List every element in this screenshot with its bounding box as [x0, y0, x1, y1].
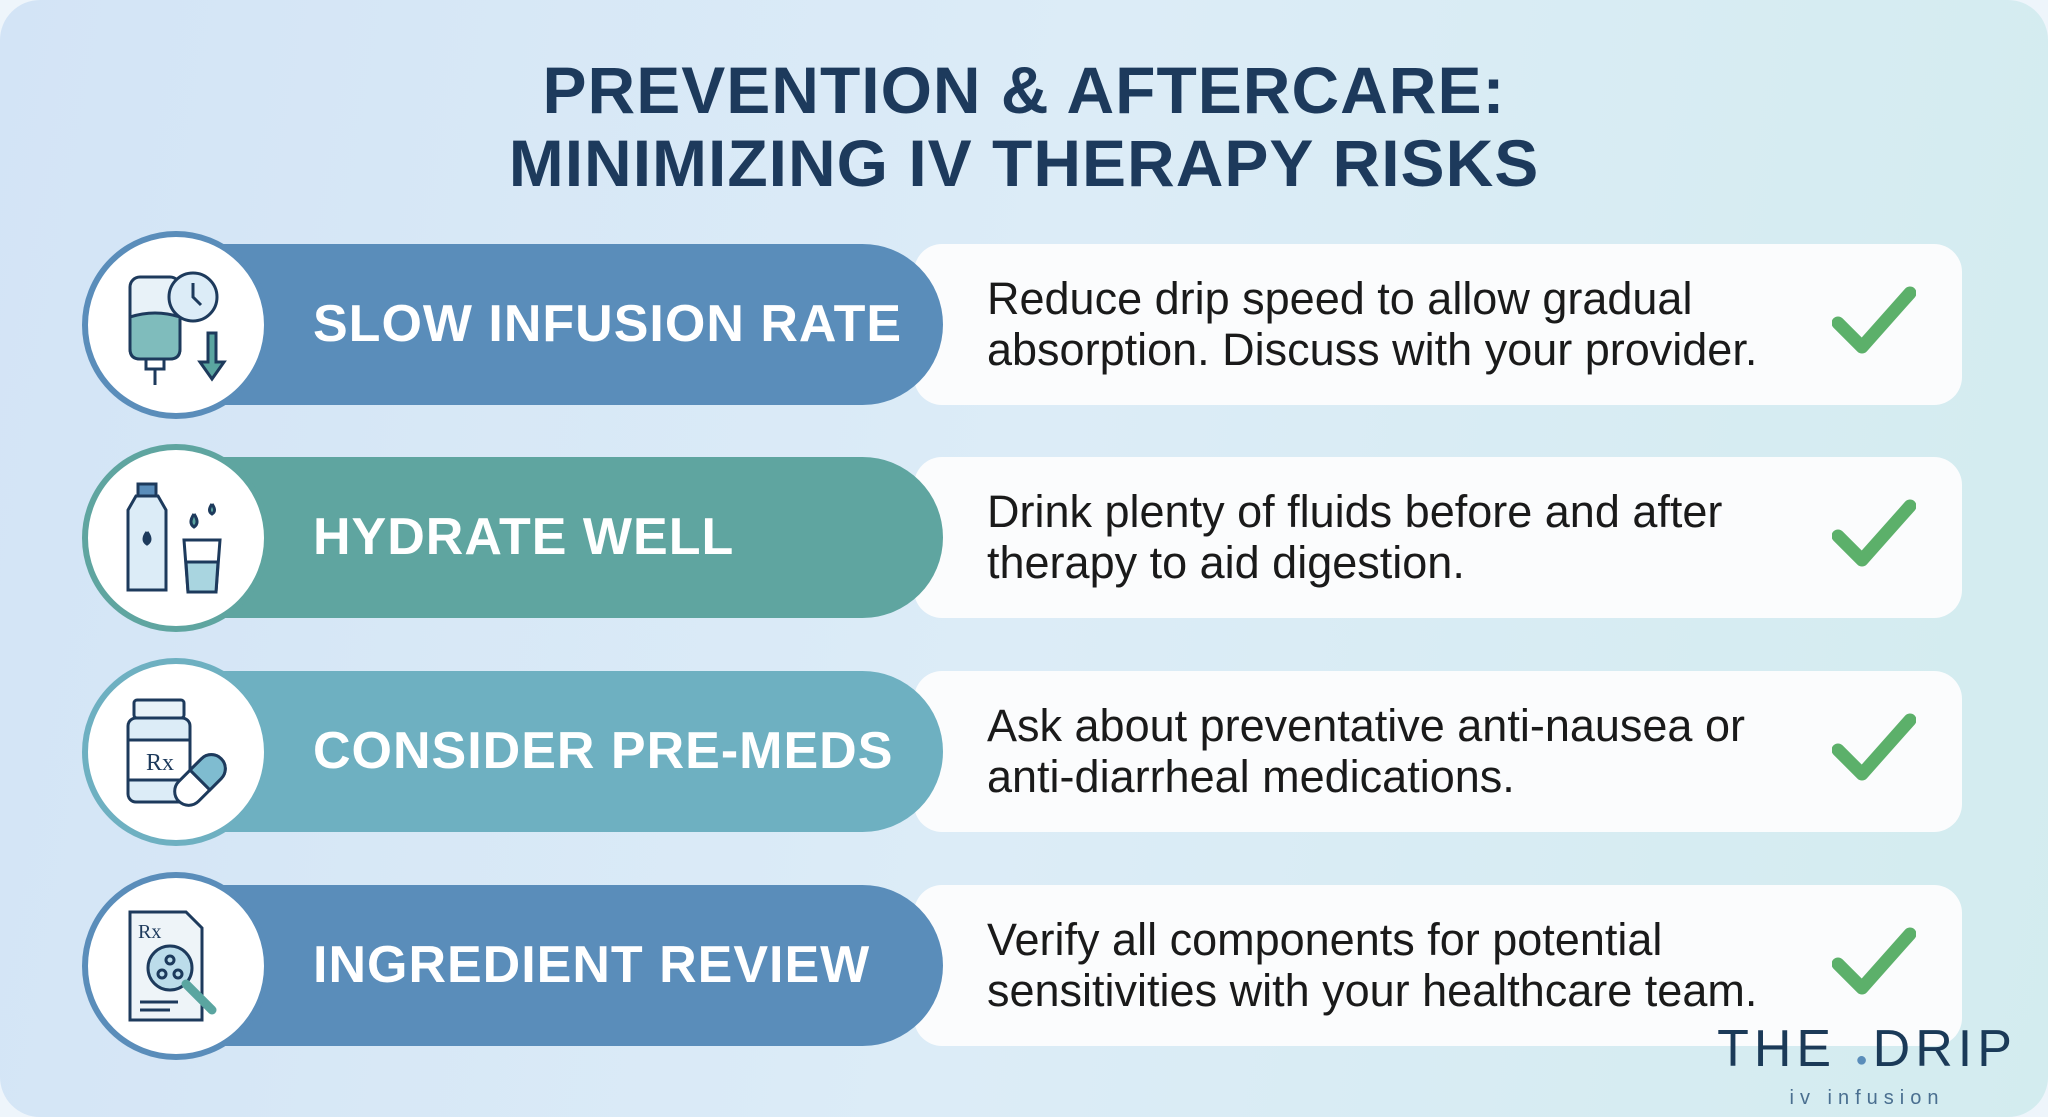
text: sensitivities with your healthcare team. [987, 965, 1757, 1016]
text: Reduce drip speed to allow gradual [987, 273, 1692, 324]
text [987, 486, 1722, 588]
pill heading: SLOW INFUSION RATE [313, 295, 902, 353]
description card [914, 885, 1962, 1046]
icon: pill bottle and capsule: Rx [146, 750, 174, 776]
description card [914, 244, 1962, 405]
logo: THE ●DRIP [1717, 1020, 2017, 1078]
icon: check [1832, 928, 1916, 994]
pill heading [196, 457, 943, 618]
icon: iv bag with clock [82, 231, 270, 419]
text: Ask about preventative anti-nausea or [987, 700, 1745, 751]
row: ingredient review [82, 872, 1962, 1060]
text: Verify all components for potential [987, 914, 1662, 965]
text: absorption. Discuss with your provider. [987, 324, 1757, 375]
icon: check [1832, 714, 1916, 780]
description card [914, 457, 1962, 618]
icon: pill bottle and capsule [82, 658, 270, 846]
icon: check [1832, 286, 1916, 354]
logo [1717, 1020, 2017, 1109]
text [987, 273, 1757, 375]
pill heading: HYDRATE WELL [313, 508, 734, 566]
text [987, 700, 1745, 802]
pill heading [196, 671, 943, 832]
title: PREVENTION & AFTERCARE: [543, 53, 1505, 127]
row: slow infusion rate [82, 231, 1962, 419]
text: anti-diarrheal medications. [987, 751, 1515, 802]
logo: iv infusion [1790, 1087, 1944, 1109]
pill heading: INGREDIENT REVIEW [313, 936, 870, 994]
title: MINIMIZING IV THERAPY RISKS [509, 126, 1539, 200]
row: hydrate well [82, 444, 1962, 632]
pill heading [196, 885, 943, 1046]
description card [914, 671, 1962, 832]
pill heading: CONSIDER PRE-MEDS [313, 722, 893, 780]
text [987, 914, 1757, 1016]
title [509, 53, 1539, 200]
icon: document with magnifier [82, 872, 270, 1060]
icon: water bottle and glass [82, 444, 270, 632]
row: consider pre-meds [82, 658, 1962, 846]
pill heading [196, 244, 943, 405]
text: Drink plenty of fluids before and after [987, 486, 1722, 537]
icon: check [1832, 500, 1916, 566]
text: therapy to aid digestion. [987, 537, 1465, 588]
icon: document with magnifier: Rx [138, 921, 161, 943]
